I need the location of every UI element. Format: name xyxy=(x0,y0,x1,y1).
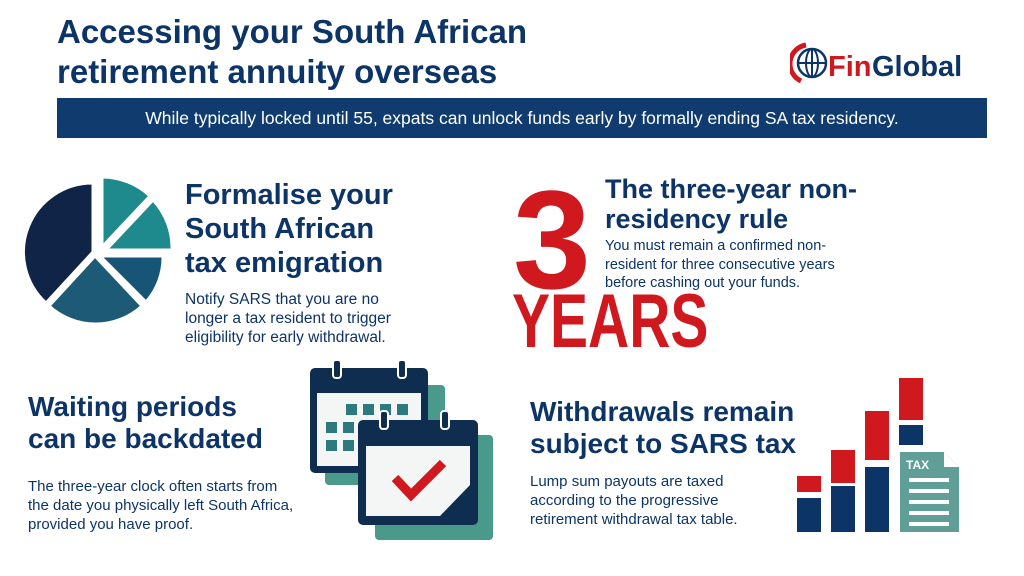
text: lump sum: retirement withdrawal tax table. xyxy=(530,511,738,528)
heading: formalise emigration: tax emigration xyxy=(185,247,383,279)
logo: FinGlobal: Global xyxy=(872,51,962,83)
text: lump sum: according to the progressive xyxy=(530,492,718,509)
text: lump sum: Lump sum payouts are taxed xyxy=(530,473,723,490)
icon: calendars xyxy=(310,361,493,540)
text: non-resident: resident for three consecutive years xyxy=(605,256,835,272)
icon: bar chart with tax doc xyxy=(797,378,959,532)
heading: three-year rule: residency rule xyxy=(605,204,788,234)
heading: formalise emigration xyxy=(185,179,393,279)
text: clock starts: The three-year clock often starts from xyxy=(28,478,277,495)
text: non-resident xyxy=(605,238,835,291)
heading: waiting periods: can be backdated xyxy=(28,423,263,454)
text: notify SARS: longer a tax resident to trigger xyxy=(185,310,391,327)
icon: bar chart with tax doc: TAX xyxy=(906,458,929,472)
text: notify SARS xyxy=(185,291,391,346)
heading: formalise emigration: South African xyxy=(185,213,374,245)
heading: withdrawals taxed: subject to SARS tax xyxy=(530,428,796,459)
text: notify SARS: eligibility for early withdrawal. xyxy=(185,329,386,346)
text: clock starts: provided you have proof. xyxy=(28,516,193,533)
big number 3 years: YEARS xyxy=(512,279,708,364)
banner: While typically locked until 55, expats can unlock funds early by formally ending SA tax residency. xyxy=(145,108,899,128)
title: retirement annuity overseas xyxy=(57,53,497,90)
heading: three-year rule: The three-year non- xyxy=(605,174,857,204)
heading: waiting periods: Waiting periods xyxy=(28,391,237,422)
heading: withdrawals taxed xyxy=(530,396,796,459)
heading: three-year rule xyxy=(605,174,857,234)
title: Accessing your South African xyxy=(57,13,527,50)
big number 3 years xyxy=(512,161,708,364)
title xyxy=(57,13,527,90)
text: non-resident: You must remain a confirmed non- xyxy=(605,238,826,254)
text: clock starts: the date you physically left South Africa, xyxy=(28,497,293,514)
icon: pie chart xyxy=(24,178,171,322)
big number 3 years: 3 xyxy=(513,161,591,318)
text: clock starts xyxy=(28,478,293,533)
text: lump sum xyxy=(530,473,738,528)
logo: FinGlobal: Fin xyxy=(828,51,872,83)
heading: formalise emigration: Formalise your xyxy=(185,179,393,211)
banner xyxy=(57,98,987,138)
text: notify SARS: Notify SARS that you are no xyxy=(185,291,379,308)
text: non-resident: before cashing out your funds. xyxy=(605,275,800,291)
heading: waiting periods xyxy=(28,391,263,454)
logo: FinGlobal xyxy=(790,42,962,84)
heading: withdrawals taxed: Withdrawals remain xyxy=(530,396,794,427)
